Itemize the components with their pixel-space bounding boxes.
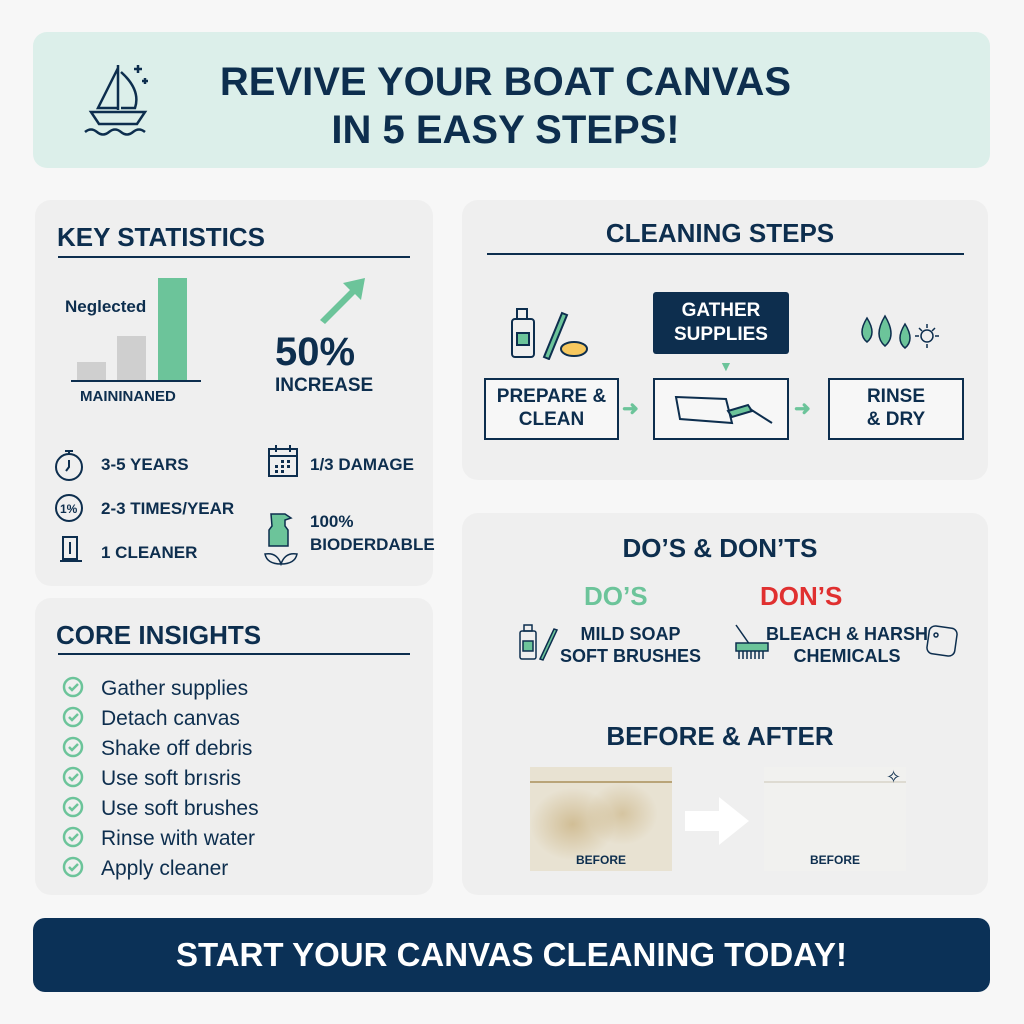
title xyxy=(220,60,791,152)
panel: do's & don'ts xyxy=(462,513,988,895)
step: rinse & dry: RINSE xyxy=(867,386,925,407)
step: prepare & clean: PREPARE & xyxy=(497,386,606,407)
panel: core insights xyxy=(35,598,433,895)
panel: key statistics xyxy=(35,200,433,586)
step: rinse & dry: & DRY xyxy=(867,409,925,430)
do's column: SOFT BRUSHES xyxy=(560,646,701,666)
heading: DO’S & DON’TS xyxy=(622,533,818,563)
arrow xyxy=(685,797,748,845)
stat list: 2-3 TIMES/YEAR xyxy=(101,499,234,518)
image: clean canvas: BEFORE xyxy=(810,853,860,867)
checklist: Shake off debris xyxy=(101,737,252,760)
step: gather supplies xyxy=(653,292,789,354)
checklist: Gather supplies xyxy=(101,677,248,700)
panel: cleaning steps xyxy=(462,200,988,480)
title: REVIVE YOUR BOAT CANVAS xyxy=(220,60,791,104)
don'ts column: CHEMICALS xyxy=(794,646,900,666)
stat: 50% increase: 50% xyxy=(275,330,355,374)
image: clean canvas xyxy=(764,767,906,871)
step: prepare & clean xyxy=(484,378,619,440)
stat list: 1/3 DAMAGE xyxy=(310,455,414,474)
heading: before & after: BEFORE & AFTER xyxy=(606,721,834,751)
step: prepare & clean: CLEAN xyxy=(519,409,584,430)
icon: sailboat xyxy=(84,65,148,136)
step: rinse & dry xyxy=(828,378,964,440)
checklist: Apply cleaner xyxy=(101,857,228,880)
call to action: START YOUR CANVAS CLEANING TODAY! xyxy=(176,936,847,973)
stat list: 1 CLEANER xyxy=(101,543,197,562)
checklist: Detach canvas xyxy=(101,707,240,730)
heading: KEY STATISTICS xyxy=(57,222,265,252)
stat list: 1% xyxy=(60,502,78,516)
footer banner xyxy=(33,918,990,992)
heading: CORE INSIGHTS xyxy=(56,620,261,650)
image: dirty canvas: BEFORE xyxy=(576,853,626,867)
step: scrub xyxy=(653,378,789,440)
checklist xyxy=(62,676,259,880)
checklist: Use soft brısris xyxy=(101,767,241,790)
checklist: Rinse with water xyxy=(101,827,255,850)
do's column: DO’S xyxy=(584,581,648,611)
bar chart xyxy=(65,278,201,405)
checklist: Use soft brushes xyxy=(101,797,259,820)
bar chart: Neglected xyxy=(65,297,146,316)
arrow: ➜ xyxy=(622,398,639,420)
image: clean canvas: ✧ xyxy=(886,767,901,787)
stat: 50% increase: INCREASE xyxy=(275,375,373,396)
panel: cleaning steps: ▼ xyxy=(719,358,733,374)
stat list: 3-5 YEARS xyxy=(101,455,189,474)
don'ts column xyxy=(735,581,958,666)
bar chart: MAININANED xyxy=(80,388,176,405)
step: gather supplies: SUPPLIES xyxy=(674,324,768,345)
don'ts column: BLEACH & HARSH xyxy=(766,624,928,644)
step: gather supplies: GATHER xyxy=(682,300,760,321)
icon: supplies xyxy=(511,308,588,360)
do's column xyxy=(519,581,701,666)
icon: water drops & sun xyxy=(861,314,939,349)
arrow: ➜ xyxy=(794,398,811,420)
stat: 50% increase xyxy=(275,278,373,396)
heading: CLEANING STEPS xyxy=(606,218,834,248)
don'ts column: DON’S xyxy=(760,581,842,611)
header banner xyxy=(33,32,990,168)
do's column: MILD SOAP xyxy=(580,624,681,644)
stat list: BIODERDABLE xyxy=(310,535,435,554)
stat list xyxy=(55,445,435,566)
image: dirty canvas xyxy=(530,767,672,871)
title: IN 5 EASY STEPS! xyxy=(331,108,680,152)
stat list: 100% xyxy=(310,512,353,531)
